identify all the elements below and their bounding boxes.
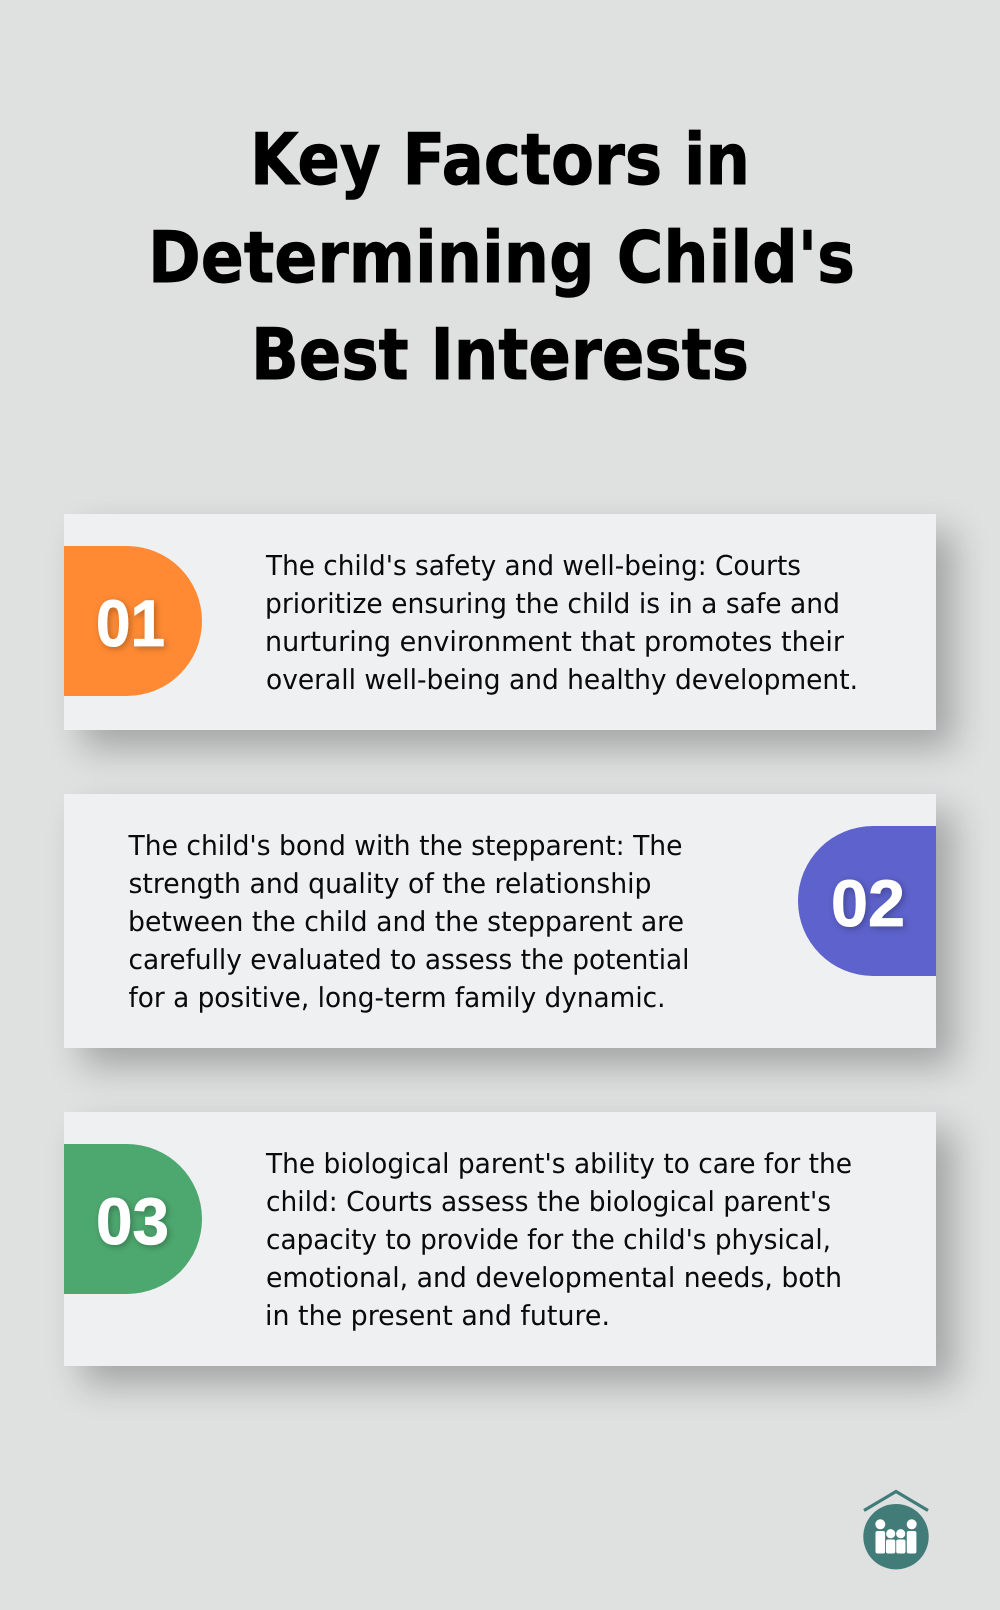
text: factor 03 description: emotional, and developmental needs, both [266,1262,842,1294]
text: factor 03 description: The biological parent's ability to care for the [265,1148,852,1180]
text: factor 02 description: between the child and the stepparent are [128,906,684,938]
text: factor 03 description: in the present and future. [265,1300,610,1332]
text: factor 02 description: strength and quality of the relationship [128,868,652,900]
number badge 02 [798,826,936,976]
text: factor 02 description: for a positive, long-term family dynamic. [128,982,666,1014]
panel: factor 01 safety and well-being [64,514,954,748]
title: Best Interests [251,313,749,396]
text: factor 02 description [128,830,689,1014]
number badge 01 [64,546,202,696]
text: factor 01 description: nurturing environment that promotes their [265,626,845,658]
number badge 01: 01 [96,586,165,660]
number badge 03: 03 [96,1184,169,1258]
text: factor 03 description [265,1148,852,1332]
title: Determining Child's [148,216,855,299]
icon: family under roof logo [863,1492,929,1569]
text: factor 02 description: carefully evaluated to assess the potential [128,944,690,976]
panel: factor 03 biological parent's ability [64,1112,954,1384]
text: factor 01 description: overall well-being and healthy development. [266,664,858,696]
text: factor 01 description: The child's safety and well-being: Courts [265,550,801,582]
panel: factor 02 bond with stepparent [64,794,954,1066]
text: factor 03 description: capacity to provide for the child's physical, [266,1224,831,1256]
text: factor 01 description: prioritize ensuring the child is in a safe and [265,588,840,620]
text: factor 01 description [265,550,858,696]
title: Key Factors in [250,118,750,201]
text: factor 02 description: The child's bond with the stepparent: The [128,830,682,862]
number badge 03 [64,1144,202,1294]
text: factor 03 description: child: Courts assess the biological parent's [266,1186,831,1218]
title [148,118,855,396]
number badge 02: 02 [831,866,905,940]
